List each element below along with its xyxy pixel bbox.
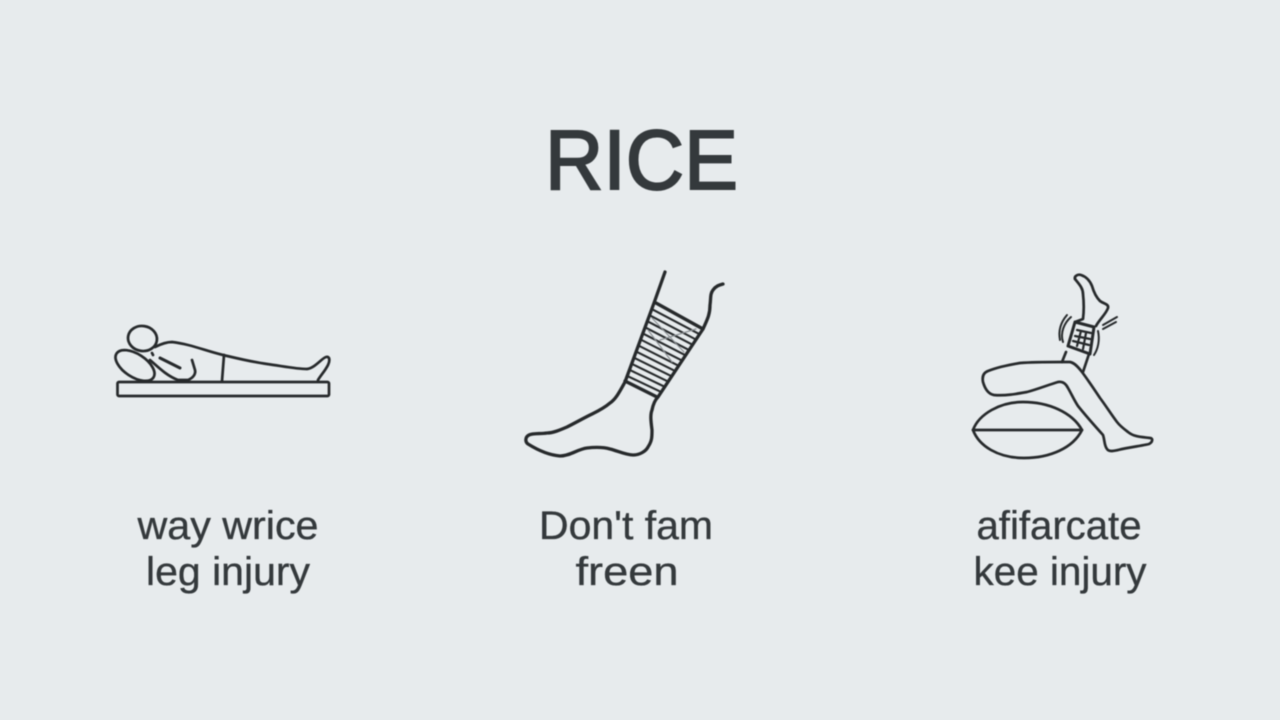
label: Don't fam freen bbox=[539, 504, 713, 594]
icon: elevated leg on a pillow bbox=[973, 275, 1152, 458]
icon detail: ice pack grid bbox=[1073, 330, 1091, 349]
label: afifarcate kee injury: kee injury bbox=[974, 550, 1146, 594]
icon: person resting on a mat bbox=[110, 324, 329, 396]
label: way wrice leg injury: way wrice bbox=[136, 504, 318, 548]
label: way wrice leg injury bbox=[136, 504, 318, 594]
icon: bandaged lower leg and foot bbox=[526, 272, 723, 456]
label: afifarcate kee injury: afifarcate bbox=[976, 504, 1142, 548]
label: Don't fam freen: freen bbox=[576, 550, 678, 594]
label: Don't fam freen: Don't fam bbox=[539, 504, 713, 548]
icon detail: bandage wraps bbox=[627, 309, 700, 392]
title: RICE bbox=[545, 113, 738, 207]
label: way wrice leg injury: leg injury bbox=[146, 550, 310, 594]
label: afifarcate kee injury bbox=[974, 504, 1146, 594]
